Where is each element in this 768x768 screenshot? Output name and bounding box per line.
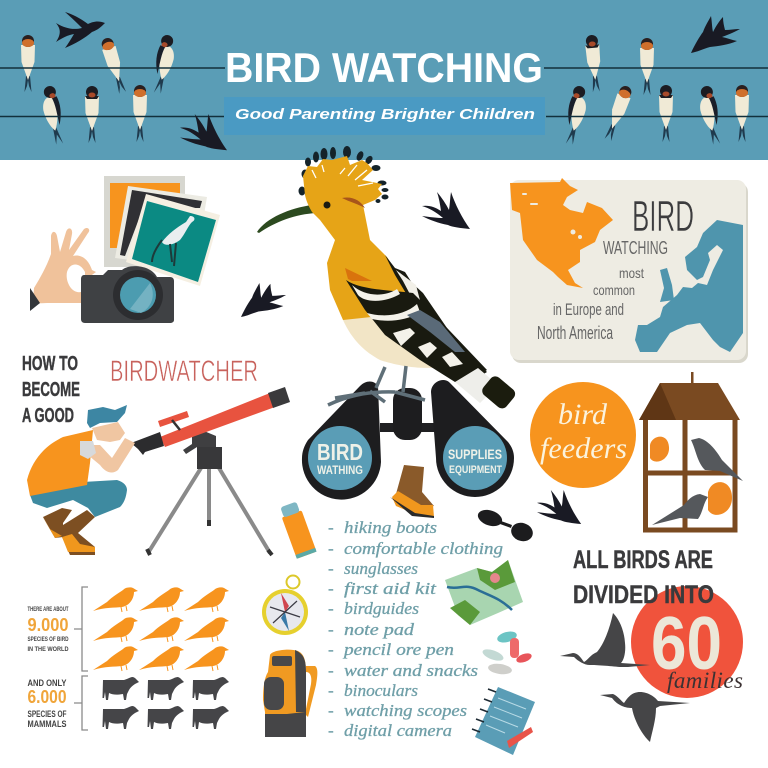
species statistics: [28, 587, 229, 730]
hand: [30, 228, 96, 311]
legs and feet: [328, 366, 425, 405]
crane lower: [600, 692, 690, 742]
beak: [257, 205, 317, 233]
heading: all birds are divided into: DIVIDED INTO: [573, 581, 714, 609]
wing: [346, 280, 487, 382]
binoculars: [302, 366, 514, 500]
sixty families badge: [631, 586, 743, 698]
crest white streaks: [312, 165, 373, 186]
head: [92, 422, 125, 442]
map caption: in Europe and: [553, 300, 624, 319]
bird feeders badge: feeders: [540, 432, 627, 465]
swallow near hoopoe right: [422, 192, 470, 229]
crest notch: [342, 197, 365, 208]
left lens text: BIRD: [317, 439, 363, 465]
golden body: [303, 156, 413, 330]
bird bottom: [652, 494, 708, 525]
mammal species text: MAMMALS: [28, 719, 66, 729]
sleeve: [80, 441, 96, 459]
cow icons: [102, 677, 229, 729]
heading: how to become a good: BECOME: [22, 379, 80, 401]
map caption: [537, 238, 668, 343]
equipment list: note pad: [344, 620, 415, 639]
equipment list: hiking boots: [344, 518, 437, 537]
pants: [30, 480, 127, 517]
heading: birdwatcher: BIRDWATCHER: [110, 355, 258, 388]
mammal species text: AND ONLY: [28, 678, 67, 689]
tail tip: [480, 374, 518, 411]
left lens text: WATHING: [317, 463, 363, 477]
equipment list: -: [328, 599, 334, 618]
map: britain: [660, 268, 674, 302]
bird species text: 9.000: [28, 615, 68, 635]
map: north america: [510, 178, 613, 288]
equipment list: -: [328, 721, 334, 740]
bird species text: IN THE WORLD: [28, 646, 69, 653]
sunglasses: [476, 507, 535, 544]
equipment list: -: [328, 661, 334, 680]
eye: [324, 202, 330, 208]
wing patch: [345, 268, 372, 281]
subtitle: Good Parenting Brighter Children: [235, 106, 535, 123]
post: [691, 372, 694, 384]
map: lakes: [522, 193, 582, 239]
tube: [160, 393, 275, 447]
perched swallows right: [564, 34, 749, 146]
mammal species text: [28, 678, 67, 729]
map caption: common: [593, 282, 635, 298]
right lens: [443, 426, 507, 490]
equipment list: binoculars: [344, 681, 418, 700]
heading: how to become a good: HOW TO: [22, 353, 78, 375]
swallow near hoopoe left: [241, 283, 286, 317]
wing stripes: [352, 285, 463, 367]
swallow near sunglasses: [537, 490, 581, 524]
equipment list: first aid kit: [344, 579, 438, 598]
bird species text: THERE ARE ABOUT: [28, 607, 69, 613]
equipment list: -: [328, 559, 334, 578]
cap: [87, 405, 127, 428]
right lens text: [448, 446, 502, 476]
equipment list: -: [328, 681, 334, 700]
bird feeders badge: [530, 382, 636, 488]
equipment list: water and snacks: [344, 661, 478, 680]
flying swallow top left: [56, 12, 105, 48]
grey primaries: [407, 310, 465, 352]
orange feed top: [650, 437, 669, 462]
left lens text: [317, 439, 363, 477]
orange feed bottom: [708, 482, 732, 515]
equipment list: -: [328, 579, 334, 598]
equipment list: -: [328, 620, 334, 639]
bird feeders badge: bird: [558, 398, 608, 431]
panel: world map: [510, 178, 748, 363]
equipment list: -: [328, 518, 334, 537]
telescope: [131, 387, 290, 555]
hoopoe bird: [257, 146, 518, 411]
map icon: [445, 560, 523, 625]
subtitle bar: [224, 97, 545, 135]
header band: [0, 0, 768, 160]
right barrel: [431, 380, 514, 497]
photo stork picture: [132, 201, 216, 282]
heading: how to become a good: A GOOD: [22, 405, 74, 427]
crest tips: [298, 146, 388, 203]
equipment list: -: [328, 539, 334, 558]
frame: [646, 420, 735, 530]
vest: [27, 430, 93, 496]
number 60: 60: [651, 601, 722, 685]
left barrel: [302, 382, 381, 500]
brackets: [74, 587, 88, 730]
flying swallow on wire: [180, 114, 227, 150]
photo orange: [104, 176, 185, 267]
backpack: [263, 650, 317, 737]
families label: families: [667, 668, 743, 693]
bird top: [691, 438, 743, 481]
compass: [262, 576, 308, 635]
equipment list: watching scopes: [344, 701, 467, 720]
flying swallow top right: [691, 16, 740, 53]
finder: [158, 411, 189, 430]
equipment list: pencil ore pen: [343, 640, 454, 659]
equipment list: -: [328, 701, 334, 720]
roof: [639, 383, 740, 420]
camera body: [81, 266, 174, 323]
camera lens: [113, 270, 163, 320]
map: europe: [635, 220, 743, 352]
left lens: [308, 426, 372, 490]
crane upper: [560, 613, 650, 667]
map caption: most: [619, 265, 644, 281]
heading: how to become a good: [22, 353, 80, 427]
birdwatcher figure: [27, 405, 135, 555]
mammal species text: 6.000: [28, 687, 66, 707]
equipment list: -: [328, 640, 334, 659]
right lens text: EQUIPMENT: [449, 464, 502, 476]
bird species text: [28, 607, 69, 653]
photo stork frame: [126, 194, 220, 286]
wires: [0, 68, 768, 116]
notepad: [472, 687, 535, 755]
right lens text: SUPPLIES: [448, 446, 502, 462]
bridge: [380, 423, 435, 432]
photo dark: [115, 186, 207, 268]
mount: [197, 447, 222, 469]
tube cap: [268, 387, 290, 408]
equipment list: digital camera: [344, 721, 452, 740]
mammal species text: SPECIES OF: [28, 709, 67, 719]
heading: all birds are divided into: ALL BIRDS ARE: [573, 546, 713, 574]
boots: [43, 508, 72, 538]
tail: [455, 368, 498, 403]
equipment list: [328, 518, 503, 740]
heading: all birds are divided into: [573, 546, 714, 609]
back feathers: [385, 255, 487, 382]
equipment list: sunglasses: [344, 559, 418, 578]
eyepiece: [131, 432, 164, 455]
stork: [152, 216, 194, 266]
equipment list: comfortable clothing: [344, 539, 503, 558]
thermos: [278, 501, 317, 559]
pills: [481, 630, 533, 676]
bird species text: SPECIES OF BIRD: [28, 636, 69, 643]
perched swallows left: [21, 34, 177, 146]
title: BIRD WATCHING: [225, 44, 543, 91]
orange bird icons: [93, 587, 229, 671]
hiking boot: [390, 465, 434, 518]
map caption: North America: [537, 323, 614, 343]
arm: [88, 438, 135, 472]
photos and camera: [30, 176, 220, 323]
tripod: [148, 468, 270, 553]
equipment list: birdguides: [344, 599, 419, 618]
belly: [343, 315, 440, 368]
map caption: WATCHING: [603, 238, 668, 258]
bird feeder house: [639, 372, 743, 530]
map heading: BIRD: [632, 192, 694, 241]
